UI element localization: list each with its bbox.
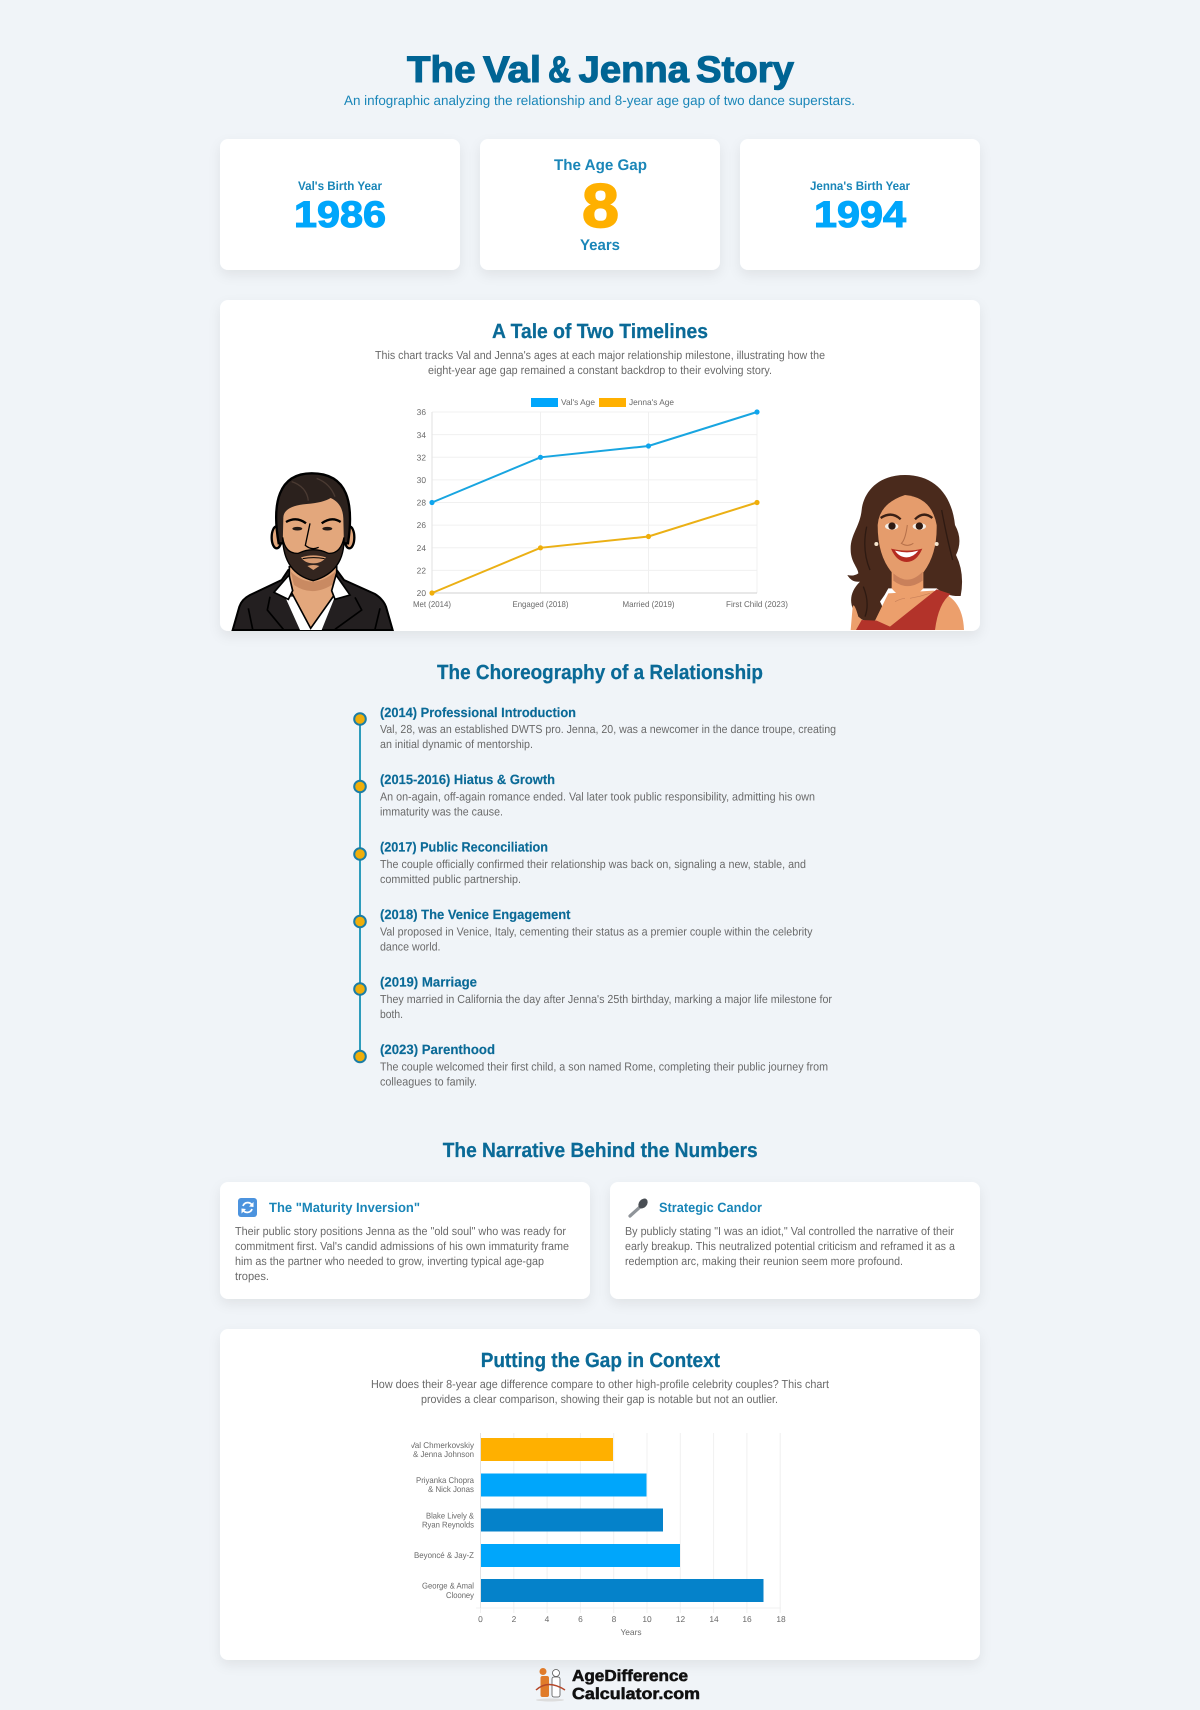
x axis ticks: 6 [578,1614,583,1624]
milestone 2018: (2018) The Venice Engagement [380,907,571,922]
milestone 2014: (2014) Professional Introduction [380,705,576,720]
category labels: Val Chmerkovskiy [410,1440,475,1450]
stat card: Val's birth year [220,139,460,270]
description [371,1378,830,1406]
section heading: choreography: The Choreography of a Relationship [437,661,763,684]
stat card: Jenna's birth year: 1994 [814,194,906,235]
icon: arrows [238,1198,257,1217]
illustration: Jenna portrait [847,475,964,630]
x axis ticks: 0 [478,1614,483,1624]
stat card: Val's birth year: 1986 [294,194,386,235]
title: Val [483,49,541,90]
stat card: the age gap [480,139,720,270]
milestone 2017 [354,840,806,886]
bar: Val & Jenna 8 [481,1438,613,1461]
panel: strategic candor: By publicly stating "I was an idiot," Val controlled the narrative of their [625,1225,954,1238]
milestone 2015-2016 [354,772,815,818]
stat card: the age gap: 8 [582,172,619,241]
x axis ticks: 16 [742,1614,752,1624]
legend: Val's Age [561,397,595,407]
panel: strategic candor: Strategic Candor [659,1200,763,1215]
y axis labels: 30 [417,475,426,485]
x axis ticks: 12 [676,1614,685,1624]
y axis labels: 24 [417,543,426,553]
x axis ticks: 2 [512,1614,517,1624]
category labels: Priyanka Chopra [416,1475,474,1485]
y axis labels: 20 [417,588,426,598]
legend [531,397,674,407]
description: eight-year age gap remained a constant backdrop to their evolving story. [428,364,772,377]
icon: two figures [536,1668,565,1702]
x axis labels: Met (2014) [413,599,451,609]
milestone 2023: The couple welcomed their first child, a son named Rome, completing their public journey from [380,1060,828,1074]
stat card: Jenna's birth year [740,139,980,270]
category labels: Blake Lively & [426,1510,474,1520]
category labels: Beyoncé & Jay-Z [414,1550,474,1560]
panel: maturity inversion: him as the partner who needed to grow, inverting typical age-gap [235,1255,544,1268]
x axis labels [413,599,788,609]
panel: maturity inversion: Their public story positions Jenna as the "old soul" who was ready for [235,1225,566,1238]
line chart: ages at milestones [413,397,788,609]
x axis labels: First Child (2023) [726,599,788,609]
milestone 2014 [354,705,836,751]
y axis labels: 26 [417,520,426,530]
milestone 2018 [354,907,813,954]
y axis labels: 36 [417,407,426,417]
bar: Priyanka & Nick 10 [481,1474,646,1496]
stat card: the age gap: The Age Gap [554,157,647,174]
footer logo [536,1668,700,1703]
y axis labels [417,407,426,598]
icon: microphone [630,1197,650,1216]
milestone 2019: They married in California the day after Jenna's 25th birthday, marking a major life milestone for [380,993,832,1006]
panel: strategic candor: redemption arc, making their reunion seem more profound. [625,1255,903,1268]
x axis labels: Married (2019) [622,599,675,609]
milestone 2015-2016: immaturity was the cause. [380,806,503,818]
milestone 2015-2016: An on-again, off-again romance ended. Val later took public responsibility, admitting his own [380,790,815,804]
milestone 2023 [354,1042,828,1088]
stat card: Val's birth year: Val's Birth Year [298,179,382,193]
description: provides a clear comparison, showing their gap is notable but not an outlier. [421,1393,778,1406]
logo text [572,1668,700,1703]
milestone 2014: an initial dynamic of mentorship. [380,738,533,751]
category labels [410,1440,475,1600]
milestone 2017: committed public partnership. [380,873,521,886]
section heading: narrative: The Narrative Behind the Numbers [443,1139,758,1162]
milestone 2019 [354,974,832,1021]
x axis title: Years [620,1627,642,1637]
x axis ticks: 14 [709,1614,719,1624]
logo text: Calculator.com [572,1686,700,1703]
title: Jenna [579,49,689,90]
description: How does their 8-year age difference compare to other high-profile celebrity couples? This chart [371,1378,830,1391]
stat card: the age gap: Years [580,237,620,254]
panel: strategic candor [610,1182,980,1299]
milestone 2023: colleagues to family. [380,1076,477,1088]
illustration: Val portrait [233,473,393,630]
milestone 2018: dance world. [380,940,440,954]
panel: maturity inversion [220,1182,590,1299]
milestone 2017: (2017) Public Reconciliation [380,840,548,854]
title: The [407,49,476,90]
milestone 2019: (2019) Marriage [380,974,477,990]
x axis ticks: 8 [612,1614,617,1624]
category labels: Clooney [446,1590,475,1600]
x axis ticks [478,1614,786,1624]
panel: a tale of two timelines [220,300,980,631]
milestone 2023: (2023) Parenthood [380,1042,495,1057]
title: & [548,49,571,90]
y axis labels: 28 [417,498,426,508]
bar: Blake & Ryan 11 [481,1508,663,1532]
heading: Putting the Gap in Context [481,1349,720,1372]
panel: maturity inversion: commitment first. Val's candid admissions of his own immaturity frame [235,1240,569,1253]
title: Story [696,49,794,90]
heading: A Tale of Two Timelines [492,320,708,343]
legend: Jenna's Age [629,397,674,407]
y axis labels: 32 [417,452,426,462]
bar: George & Amal 17 [481,1579,764,1602]
milestone 2017: The couple officially confirmed their relationship was back on, signaling a new, stable, and [380,858,806,871]
x axis ticks: 10 [642,1614,652,1624]
subtitle: An infographic analyzing the relationship and 8-year age gap of two dance superstars. [344,93,855,108]
category labels: Ryan Reynolds [422,1520,474,1530]
category labels: George & Amal [422,1580,474,1590]
x axis labels: Engaged (2018) [512,599,569,609]
milestone 2019: both. [380,1008,403,1021]
logo text: AgeDifference [572,1668,688,1685]
stat card: Jenna's birth year: Jenna's Birth Year [810,179,910,193]
timeline [354,705,836,1088]
line: Jenna's age [429,500,760,596]
description [375,349,825,377]
y axis labels: 22 [417,566,426,576]
panel: putting the gap in context [220,1329,980,1660]
category labels: & Jenna Johnson [413,1449,474,1459]
x axis ticks: 18 [776,1614,786,1624]
bar chart: celebrity age gaps [410,1433,786,1637]
milestone 2014: Val, 28, was an established DWTS pro. Jenna, 20, was a newcomer in the dance troupe, creating [380,723,836,736]
panel: maturity inversion: tropes. [235,1270,269,1283]
panel: strategic candor: early breakup. This neutralized potential criticism and reframed it as a [625,1240,955,1253]
milestone 2015-2016: (2015-2016) Hiatus & Growth [380,772,555,787]
y axis labels: 34 [417,430,426,440]
milestone 2018: Val proposed in Venice, Italy, cementing their status as a premier couple within the celebrity [380,926,813,938]
x axis ticks: 4 [545,1614,550,1624]
category labels: & Nick Jonas [428,1484,474,1494]
description: This chart tracks Val and Jenna's ages at each major relationship milestone, illustrating how the [375,349,825,362]
bar: Beyoncé & Jay-Z 12 [481,1544,680,1567]
line: Val's age [429,409,760,505]
panel: maturity inversion: The "Maturity Inversion" [269,1200,420,1215]
